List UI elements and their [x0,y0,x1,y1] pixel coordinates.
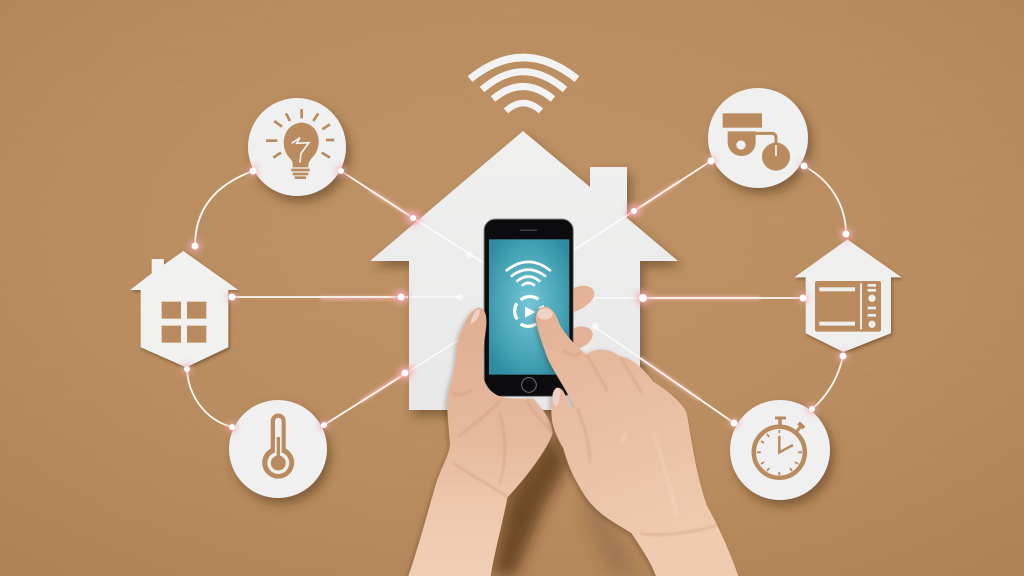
phone [484,219,573,396]
small house: microwave [794,239,902,352]
circle: thermometer [229,400,327,498]
icon: light bulb [266,109,334,178]
left hand [408,308,553,576]
right hand highlights [620,433,677,517]
icon: stopwatch [754,418,805,478]
hands and phone [408,219,738,576]
circle: stopwatch [730,400,830,500]
circle: camera [708,88,808,188]
connection lines [187,161,846,427]
phone screen [489,239,569,375]
screen play icon [515,297,544,326]
phone earpiece [520,229,537,231]
small house: windows [130,251,238,367]
left hand fingers behind phone [572,286,594,351]
left hand shading [452,390,552,497]
circle: light bulb [248,98,346,196]
wifi symbol above house [470,58,577,111]
screen page dots [524,336,536,338]
right hand [536,307,738,576]
thumb nail [553,388,560,406]
large paper house [370,131,678,410]
shadow cast by hands between wrists [492,430,640,576]
right hand shading [563,350,717,535]
icon: window [162,302,206,343]
icon: microwave [815,281,881,332]
screen wifi icon [507,262,550,285]
home button [522,378,536,392]
left thumb nail [471,309,480,324]
node dots with pink glow [182,156,852,432]
connection lines on brown paper, glow [320,181,760,402]
index fingernail [537,308,553,320]
icon: security camera and clock [723,113,790,171]
icon: thermometer [262,414,294,479]
